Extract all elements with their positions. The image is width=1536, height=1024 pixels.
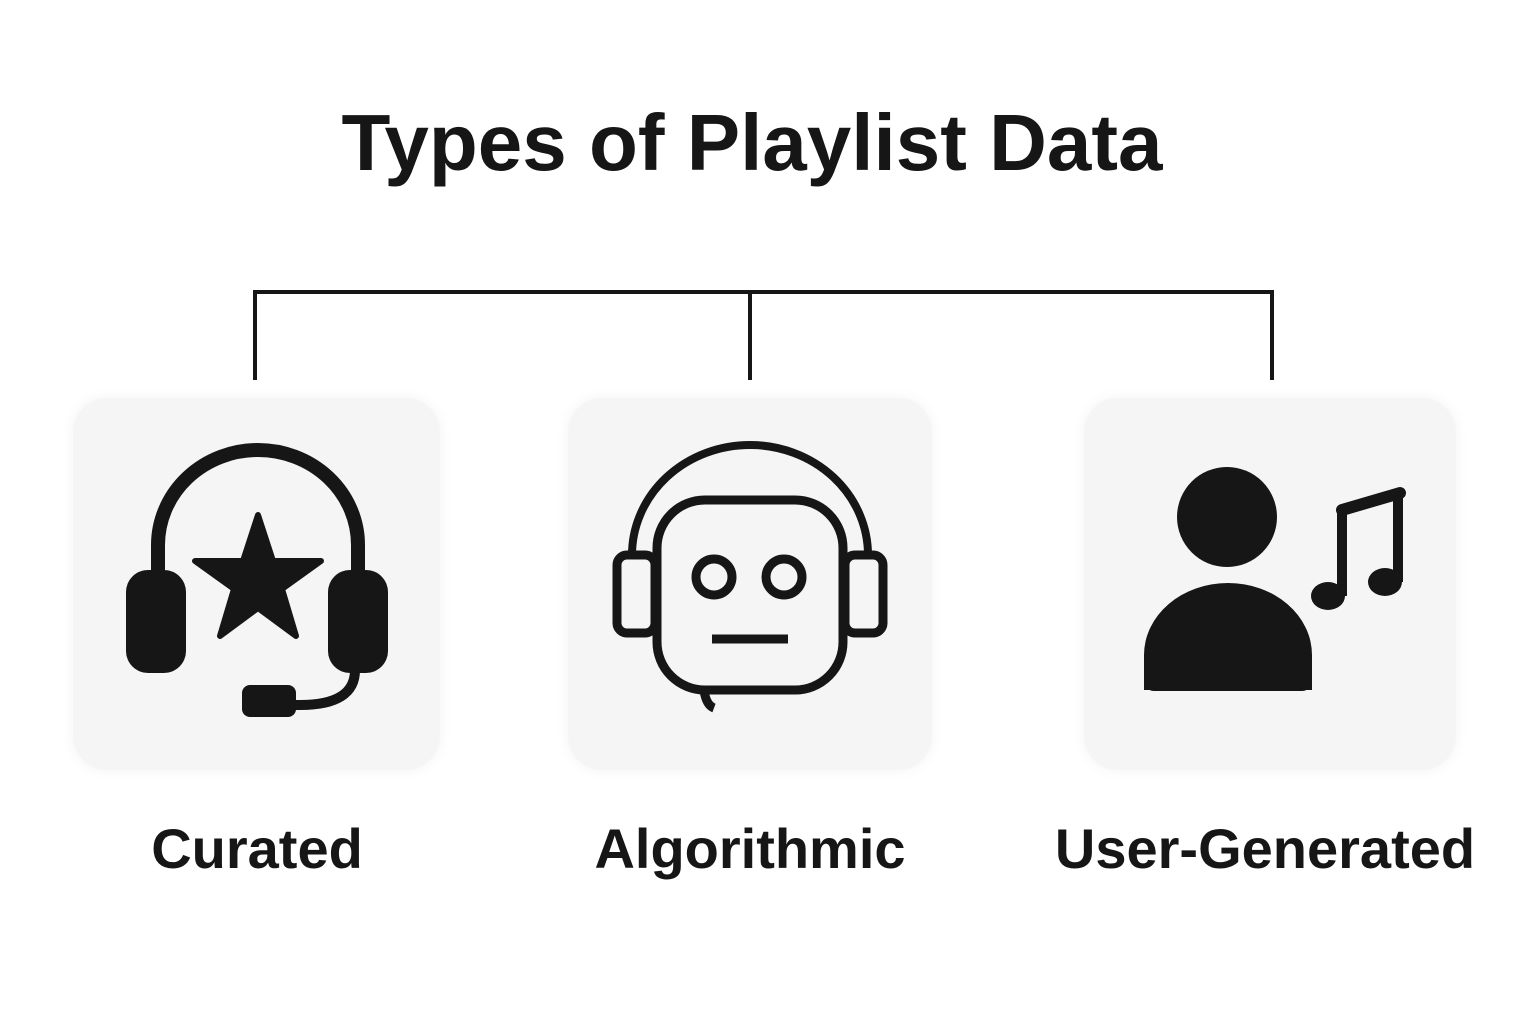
connector tree — [255, 292, 1272, 380]
card: curated — [73, 398, 440, 770]
card: algorithmic — [568, 398, 932, 770]
icon: person with music note — [1144, 467, 1402, 691]
title: Types of Playlist Data — [341, 98, 1162, 187]
label: algorithmic: Algorithmic — [594, 817, 906, 880]
icon: robot with headphones — [617, 445, 883, 708]
label: curated: Curated — [151, 817, 363, 880]
card: user-generated — [1084, 398, 1456, 770]
icon: headset with star — [126, 450, 388, 717]
label: user-generated: User-Generated — [1055, 817, 1475, 880]
